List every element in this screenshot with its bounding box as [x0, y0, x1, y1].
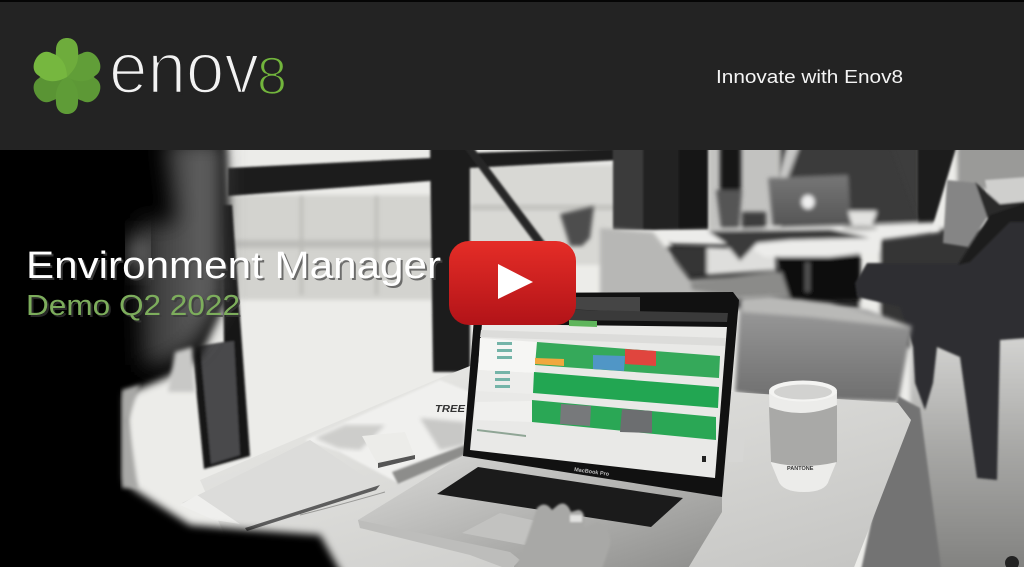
backpack [958, 198, 1024, 265]
title: Environment Manager [26, 245, 441, 287]
device edge [378, 455, 415, 468]
plant in pot, distant [560, 206, 594, 246]
white left chair [600, 228, 790, 300]
back chair [943, 180, 990, 247]
legend [477, 429, 526, 437]
window frames [228, 145, 957, 372]
coffee cup [848, 211, 877, 226]
grey cell 2 [620, 409, 652, 433]
display [470, 324, 727, 478]
laptop base [358, 453, 722, 567]
chair pocket [665, 247, 707, 275]
back table top [655, 222, 940, 257]
table leg support [860, 396, 942, 567]
apple logo [802, 195, 814, 209]
trackpad [462, 513, 550, 545]
wordmark 8: 8 [257, 47, 287, 106]
screen bezel [463, 292, 739, 497]
pillar [192, 205, 250, 469]
green button [569, 320, 597, 327]
macbook label: MacBook Pro [574, 467, 610, 478]
plant pot [716, 190, 742, 228]
orange cell [535, 358, 564, 366]
book title: TREE [435, 404, 465, 415]
paper under notebook [180, 495, 240, 524]
chair back white [707, 247, 776, 275]
keyboard [437, 467, 683, 527]
white desk [200, 366, 911, 567]
mug label: PANTONE [787, 466, 814, 472]
green status grid [532, 342, 720, 440]
plant on table [720, 145, 741, 191]
table legs [777, 255, 860, 302]
subtitle: Demo Q2 2022 [26, 290, 240, 322]
laptop [358, 292, 739, 567]
dark armchair [855, 176, 1024, 480]
coffee mug [769, 380, 837, 492]
background table with laptop [600, 145, 940, 302]
icon: green clover [29, 38, 105, 114]
small white object [728, 429, 745, 462]
subtitle shadow: Demo Q2 2022 [28, 292, 242, 324]
logo: enov8 [29, 29, 287, 114]
window and floor backdrop [0, 140, 1024, 567]
notebook spine [245, 485, 380, 531]
plaid person [790, 145, 918, 222]
header band [0, 0, 1024, 150]
grey cell [560, 404, 591, 426]
cheek highlight [131, 235, 145, 271]
cushion [735, 296, 912, 402]
photo: cafe scene background [0, 140, 1024, 567]
top edge line [0, 0, 1024, 2]
mug rim [769, 380, 837, 402]
back table, right [985, 176, 1024, 208]
mug inside [774, 384, 832, 400]
hair strand [122, 385, 140, 488]
cable [300, 492, 385, 515]
lower chair shade [690, 271, 790, 298]
cushion top band [742, 296, 910, 328]
pagination [702, 456, 706, 462]
base front edge [358, 520, 520, 567]
bezel reflection [482, 297, 640, 312]
shadow behind [975, 182, 1024, 225]
wordmark enov: enov [109, 29, 259, 109]
map patch right [420, 418, 465, 450]
title shadow: Environment Manager [28, 247, 443, 289]
app title bar [482, 308, 728, 322]
table runner [708, 229, 870, 261]
hand [515, 504, 610, 567]
plaid person arm [778, 145, 800, 178]
tagline: Innovate with Enov8 [716, 66, 903, 87]
map patch left [315, 425, 385, 450]
hair and body [0, 130, 345, 567]
book stack [305, 380, 470, 484]
woman silhouette [0, 130, 345, 567]
icon: play button [449, 241, 576, 325]
mug sleeve [769, 405, 837, 466]
saucer [842, 225, 878, 231]
icon: corner badge [1005, 556, 1019, 567]
blue cell [593, 355, 625, 371]
table header [480, 330, 726, 346]
face shading [140, 140, 222, 365]
play triangle [498, 264, 533, 299]
mug body [769, 392, 837, 492]
red cell [625, 349, 656, 366]
book edge [392, 445, 465, 484]
book with map [305, 380, 470, 484]
table rows labels [474, 338, 537, 422]
white device on map [362, 432, 415, 465]
notebook [180, 440, 385, 531]
chair body [855, 222, 1024, 480]
candle holder [742, 212, 766, 230]
neck light [168, 347, 195, 392]
heading block [26, 245, 443, 324]
background laptop [768, 175, 851, 226]
